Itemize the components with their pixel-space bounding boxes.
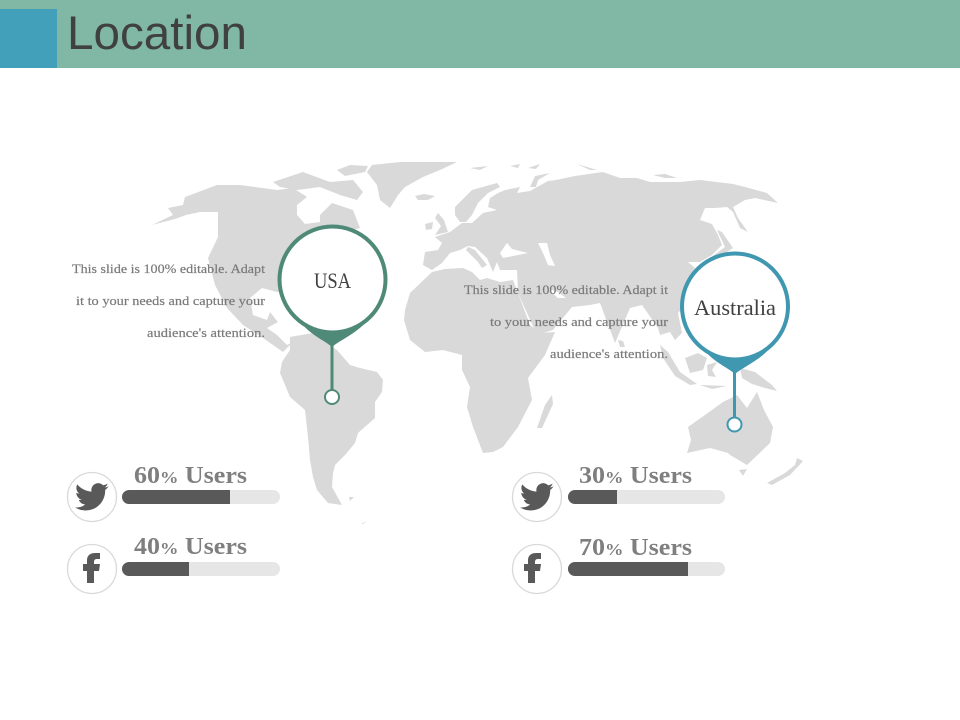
stat: USA facebook: 40% Users bbox=[134, 534, 247, 560]
Tasmania bbox=[739, 469, 747, 476]
world map bbox=[152, 162, 803, 524]
Australia bbox=[687, 392, 773, 465]
North America bbox=[152, 185, 360, 352]
South America bbox=[280, 333, 383, 505]
Australia text block: audience's attention. bbox=[550, 346, 668, 361]
header band bbox=[0, 0, 960, 68]
Sri Lanka bbox=[618, 340, 625, 347]
stat: Australia facebook: 70% Users bbox=[579, 535, 692, 561]
stat: Australia twitter bbox=[512, 463, 725, 522]
Australia text block: to your needs and capture your bbox=[490, 314, 669, 329]
stat: USA facebook bbox=[68, 534, 280, 594]
small southern islands bbox=[349, 497, 367, 524]
pin: Australia bbox=[682, 254, 788, 432]
Japan and Sakhalin bbox=[710, 230, 733, 264]
stat: Australia twitter: 30% Users bbox=[579, 463, 692, 489]
Australia text block bbox=[464, 282, 669, 361]
Italy bbox=[466, 247, 487, 268]
USA text block bbox=[72, 261, 266, 340]
pin: USA: USA bbox=[314, 268, 351, 293]
Scandinavia bbox=[455, 183, 500, 222]
inland seas bbox=[500, 243, 566, 298]
USA text block: This slide is 100% editable. Adapt bbox=[72, 261, 265, 276]
stat: Australia facebook bbox=[512, 535, 725, 594]
Iceland bbox=[415, 194, 435, 200]
United Kingdom and Ireland bbox=[425, 213, 448, 235]
Arctic islands bbox=[273, 165, 368, 200]
Madagascar bbox=[537, 395, 553, 428]
Svalbard and Russian arctic islands bbox=[470, 164, 677, 187]
pin: Australia: Australia bbox=[694, 295, 776, 320]
pin: USA bbox=[280, 226, 386, 404]
stat: USA twitter: 60% Users bbox=[134, 463, 247, 489]
Australia text block: This slide is 100% editable. Adapt it bbox=[464, 282, 668, 297]
USA text block: audience's attention. bbox=[147, 325, 265, 340]
title: Location bbox=[67, 6, 247, 59]
Greenland bbox=[367, 162, 457, 208]
stat: USA twitter bbox=[68, 463, 280, 522]
New Zealand bbox=[767, 458, 803, 485]
header accent square bbox=[0, 9, 57, 68]
New Guinea bbox=[740, 368, 777, 391]
Indonesia and Philippines bbox=[660, 330, 730, 389]
USA text block: it to your needs and capture your bbox=[76, 293, 266, 308]
Africa bbox=[404, 268, 555, 453]
Eurasia bbox=[423, 172, 778, 343]
